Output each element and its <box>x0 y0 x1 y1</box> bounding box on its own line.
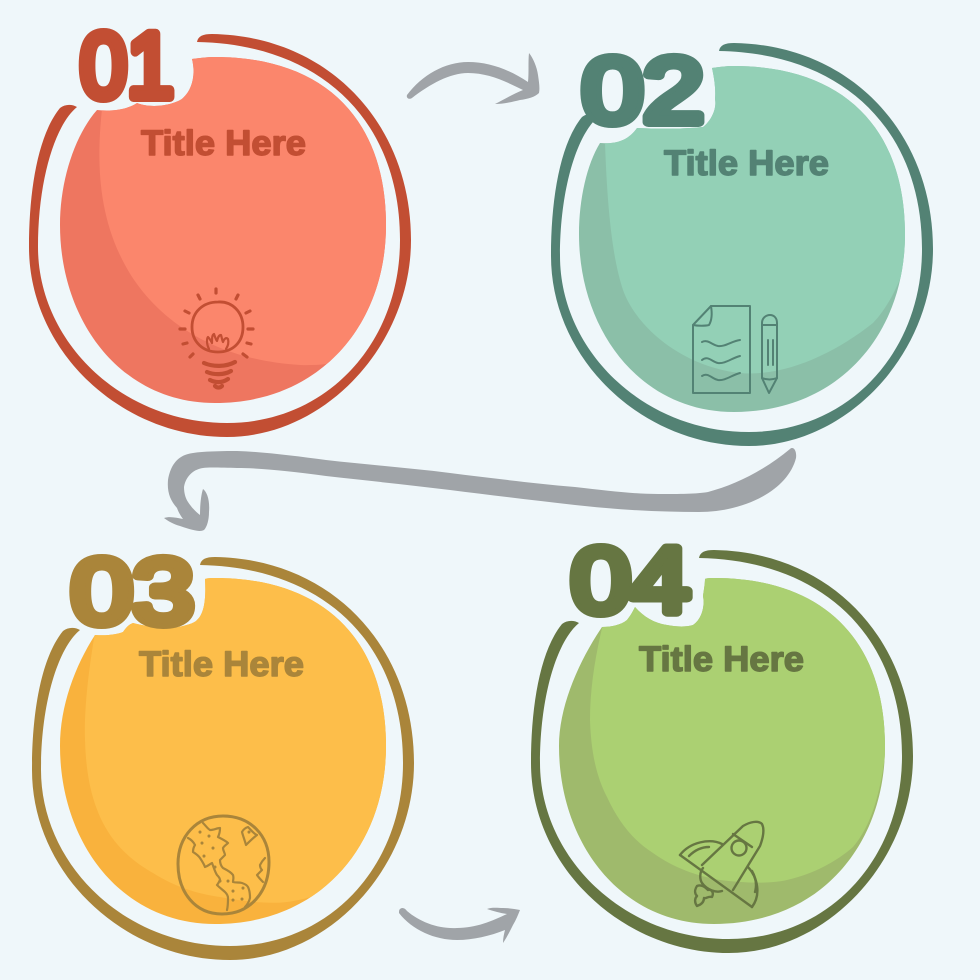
panel: step 01 <box>29 15 420 437</box>
title 03: Title Here <box>139 645 304 684</box>
number 03: 03 <box>71 541 194 643</box>
icon: light bulb <box>180 289 253 388</box>
panel: step 04 <box>531 530 919 953</box>
ring 01 <box>29 34 411 437</box>
arrow: step 2 to step 3 <box>164 448 796 531</box>
panel: step 02 <box>551 40 939 446</box>
arrow: step 1 to step 2 <box>407 53 539 104</box>
title 04: Title Here <box>639 640 804 679</box>
title 02: Title Here <box>664 144 829 183</box>
blob 01 <box>60 57 386 403</box>
title 01: Title Here <box>141 124 306 163</box>
blob 02 <box>579 66 905 412</box>
ring 02 <box>551 43 933 446</box>
blob 03 <box>60 578 386 924</box>
ring 03 <box>32 557 414 960</box>
icon: globe <box>178 816 269 914</box>
number 04: 04 <box>571 530 690 632</box>
blob 04 <box>559 578 885 924</box>
icon: rocket <box>680 822 763 907</box>
number 02: 02 <box>582 40 704 142</box>
icon: document and pencil <box>693 306 777 393</box>
number 01: 01 <box>80 15 174 117</box>
arrow: step 3 to step 4 <box>399 908 520 943</box>
ring 04 <box>531 550 913 953</box>
panel: step 03 <box>32 541 420 960</box>
